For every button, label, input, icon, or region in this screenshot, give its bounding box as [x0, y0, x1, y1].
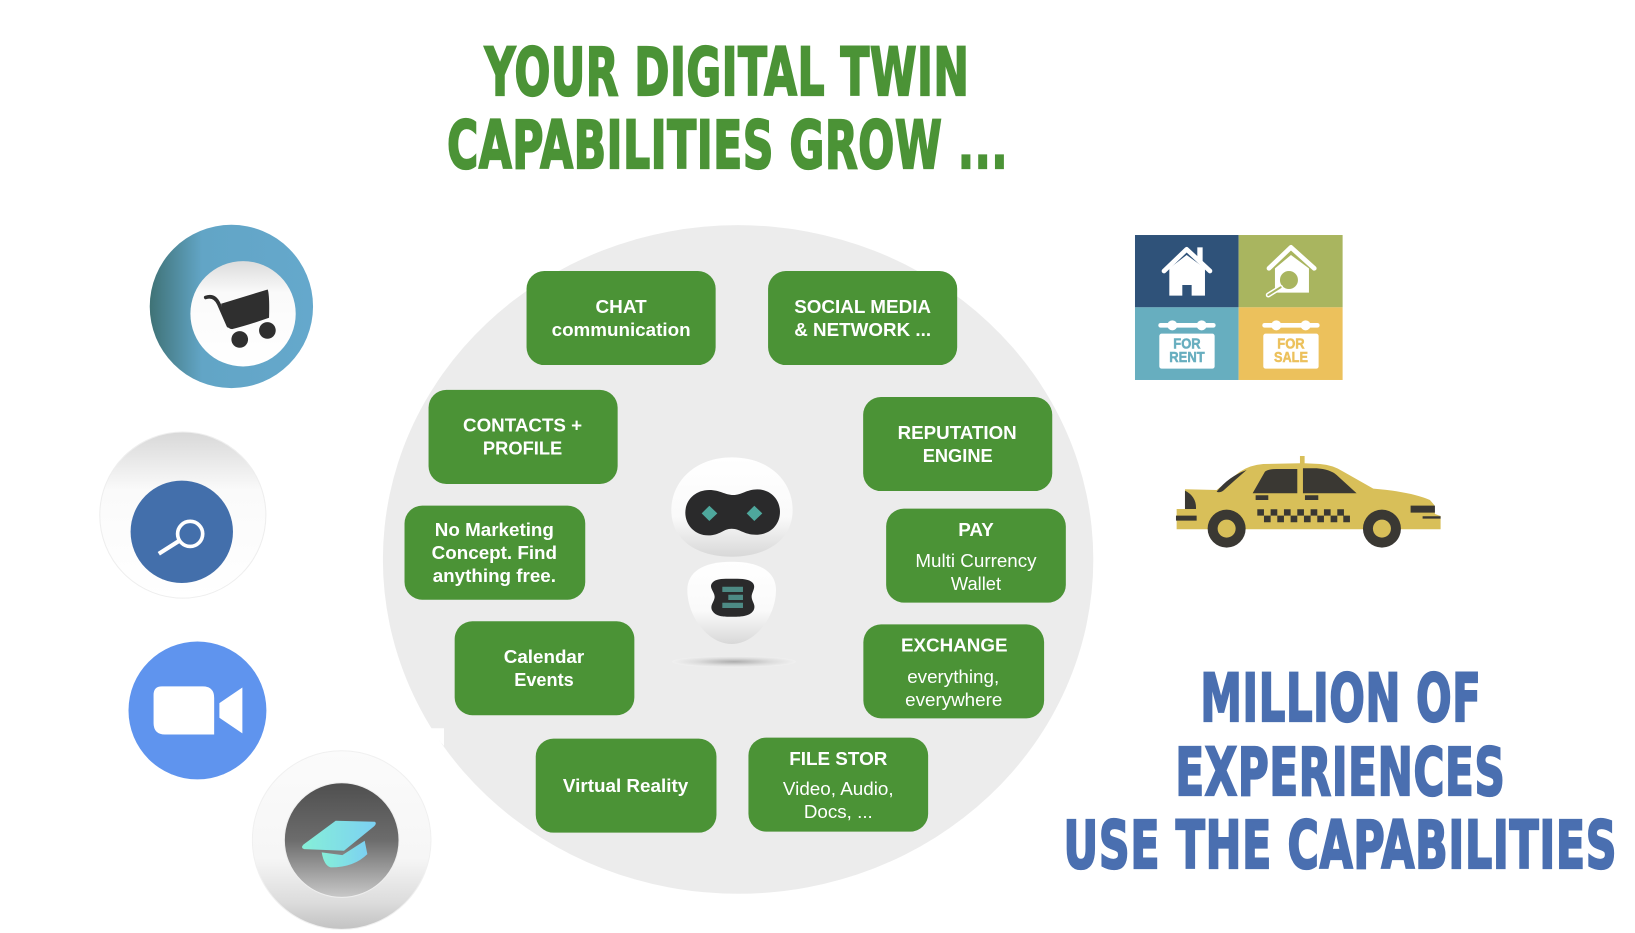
icon: shopping cart — [150, 225, 313, 388]
title: YOUR DIGITAL TWIN — [484, 34, 970, 111]
pill: social media — [768, 271, 957, 365]
pill: file storage: Video, Audio, — [783, 778, 894, 799]
pill: contacts: PROFILE — [483, 438, 562, 459]
pill: pay: PAY — [958, 519, 994, 540]
icon: real estate grid: FOR — [1173, 337, 1201, 353]
pill: no marketing: No Marketing — [435, 519, 554, 540]
pill: chat: communication — [552, 319, 691, 340]
pill: pay: Wallet — [951, 573, 1002, 594]
icon: video camera — [129, 641, 266, 779]
pill: social media: SOCIAL MEDIA — [794, 296, 931, 317]
pill: file storage: Docs, ... — [804, 801, 873, 822]
icon: search — [100, 432, 266, 598]
pill: contacts — [429, 390, 618, 484]
icon: real estate grid: RENT — [1169, 350, 1205, 366]
pill: calendar: Events — [514, 669, 574, 690]
title: CAPABILITIES GROW ... — [447, 107, 1008, 184]
pill: exchange: everywhere — [905, 689, 1002, 710]
icon: real estate grid: SALE — [1274, 350, 1308, 366]
pill: reputation: ENGINE — [923, 445, 993, 466]
pill: contacts: CONTACTS + — [463, 415, 582, 436]
icon: taxi — [1176, 456, 1441, 548]
pill: virtual reality — [536, 739, 716, 833]
icon: real estate grid — [1135, 235, 1343, 380]
pill: calendar: Calendar — [504, 646, 585, 667]
pill: chat — [527, 271, 716, 365]
pill: exchange: EXCHANGE — [901, 635, 1008, 656]
icon: robot — [671, 457, 796, 667]
pill: no marketing: Concept. Find — [432, 542, 557, 563]
pill: file storage — [748, 738, 928, 832]
pill: file storage: FILE STOR — [789, 748, 888, 769]
pill: pay — [886, 509, 1066, 603]
pill: virtual reality: Virtual Reality — [563, 775, 689, 796]
pill: exchange: everything, — [907, 666, 999, 687]
icon: graduation cap — [252, 751, 431, 929]
pill: reputation — [863, 397, 1052, 491]
panel: capabilities circle — [383, 225, 1093, 894]
pill: reputation: REPUTATION — [898, 422, 1017, 443]
pill: exchange — [863, 624, 1044, 718]
pill: calendar — [455, 621, 634, 715]
pill: no marketing: anything free. — [433, 565, 556, 586]
pill: pay: Multi Currency — [915, 550, 1037, 571]
icon: real estate grid: FOR — [1277, 337, 1305, 353]
closing statement — [1064, 660, 1617, 884]
pill: no marketing — [405, 506, 585, 600]
closing statement: MILLION OF — [1200, 660, 1481, 737]
pill: chat: CHAT — [595, 296, 647, 317]
pill: social media: & NETWORK ... — [794, 319, 931, 340]
title — [447, 34, 1008, 184]
